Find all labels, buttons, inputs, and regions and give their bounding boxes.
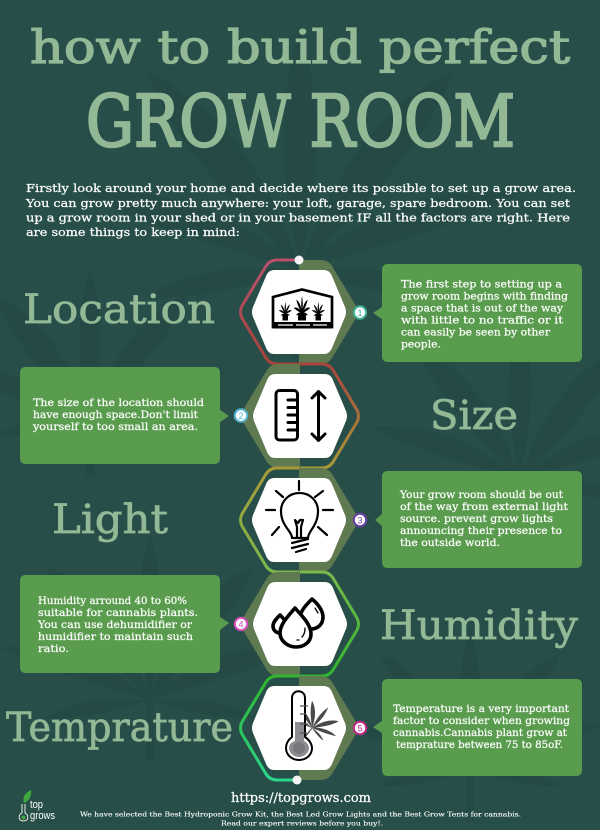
number badge 4: 4 (238, 620, 244, 630)
callout 5: temperature: Temperature is a very important (393, 704, 569, 715)
callout 5: temperature (373, 679, 582, 776)
label: Size: Size (430, 393, 518, 439)
callout 1: location: can easily be seen by other (401, 328, 550, 338)
hexagon 2: size (242, 364, 358, 468)
callout 2: size: have enough space.Don't limit (33, 410, 198, 421)
hexagon 5: temperature (240, 676, 358, 780)
number badge 5 (354, 722, 366, 734)
number badge 2: 2 (238, 411, 244, 421)
intro paragraph: are some things to keep in mind: (26, 226, 240, 239)
intro paragraph: up a grow room in your shed or in your basement IF all the factors are right. Here (26, 212, 570, 224)
intro paragraph (25, 182, 576, 239)
number badge 4 (235, 618, 247, 630)
logo: top grows (19, 790, 55, 822)
icon: thermometer with cannabis leaf (286, 691, 347, 760)
callout 1: location: with little to no traffic or it (401, 316, 563, 326)
title: GROW ROOM: GROW ROOM (86, 80, 515, 163)
number badge 3: 3 (357, 516, 363, 526)
icon: ruler and height arrow (276, 390, 325, 440)
logo: top grows: top (30, 799, 43, 811)
number badge 2 (235, 409, 247, 422)
website url: https://topgrows.com (231, 791, 371, 806)
number badge 5: 5 (357, 724, 363, 734)
callout 3: light: announcing their presence to (400, 526, 562, 537)
callout 5: temperature: cannabis.Cannabis plant grow at (393, 728, 567, 739)
callout 4: humidity: ratio. (38, 644, 69, 655)
label: Humidity: Humidity (380, 603, 578, 649)
logo: top grows: grows (30, 810, 55, 822)
callout 4: humidity: suitable for cannabis plants. (38, 608, 198, 619)
hexagon 3: light (240, 468, 358, 572)
callout 3: light: Your grow room should be out (399, 490, 563, 501)
callout 4: humidity: humidifier to maintain such (38, 632, 194, 643)
callout 4: humidity: Humidity arround 40 to 60% (38, 596, 187, 607)
callout 2: size (20, 367, 229, 464)
label: Location: Location (23, 287, 215, 333)
callout 2: size: yourself to too small an area. (32, 422, 198, 433)
section labels (6, 287, 578, 751)
number badge 3 (354, 514, 366, 526)
callout 4: humidity: You can use dehumidifier or (37, 620, 192, 631)
callout 5: temperature: temprature between 75 to 85oF. (396, 740, 563, 751)
callout 1: location (373, 264, 582, 362)
footer note (80, 810, 521, 828)
callout 1: location: grow room begins with finding (401, 292, 569, 302)
label: Temprature: Temprature (6, 705, 233, 751)
callout 1: location: The first step to setting up a (401, 280, 562, 290)
intro paragraph: Firstly look around your home and decide where its possible to set up a grow area. (26, 182, 576, 195)
callout 3: light: of the way from external light (400, 502, 568, 513)
label: Light: Light (52, 497, 168, 543)
intro paragraph: You can grow pretty much anywhere: your loft, garage, spare bedroom. You can set (25, 197, 571, 210)
callout 5: temperature: factor to consider when growing (393, 716, 571, 727)
title: how to build perfect: how to build perfect (30, 20, 571, 74)
footer note: Read our expert reviews before you buy!. (221, 820, 383, 828)
icon: light bulb (266, 481, 333, 552)
number badge 1: 1 (357, 308, 363, 318)
callout 4: humidity (20, 575, 229, 673)
callout 2: size: The size of the location should (33, 398, 205, 409)
hexagon 4: humidity (242, 572, 358, 676)
callout 3: light (375, 471, 582, 568)
icon: greenhouse (273, 290, 332, 328)
callout 1: location: people. (401, 340, 441, 350)
timeline end dots (292, 256, 304, 784)
number badge 1 (354, 306, 366, 319)
hexagon 1: location (240, 260, 358, 364)
icon: water drops (273, 599, 323, 647)
callout 3: light: the outside world. (400, 538, 500, 549)
callout 3: light: source. prevent grow lights (400, 514, 553, 525)
footer note: We have selected the Best Hydroponic Grow Kit, the Best Led Grow Lights and the Best Grow Tents for cannabis. (80, 810, 521, 818)
callout 1: location: a space that is out of the way (401, 304, 563, 314)
